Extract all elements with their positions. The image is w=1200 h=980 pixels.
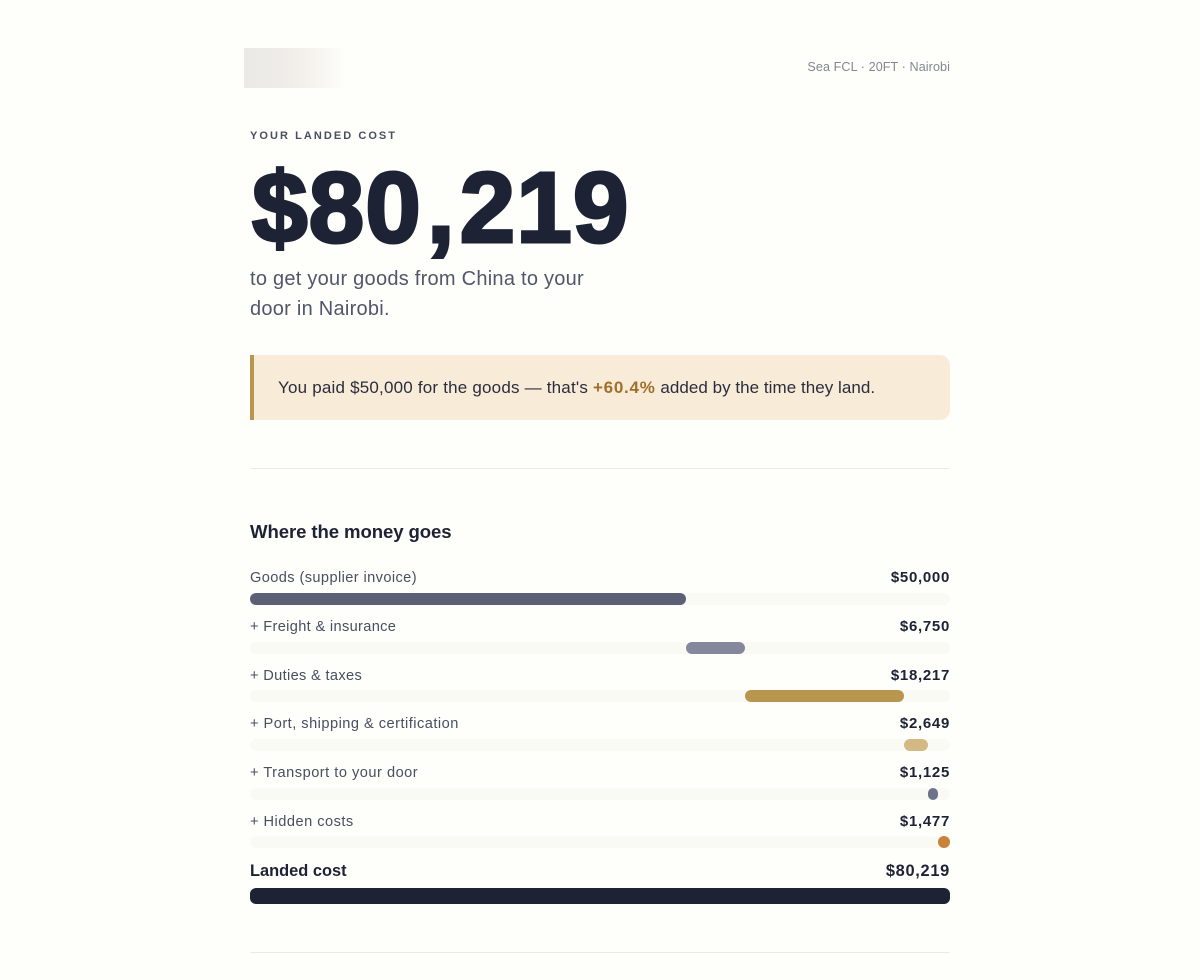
text: $1,477 <box>900 813 950 830</box>
row: landed cost total <box>250 862 950 904</box>
row: duties <box>250 667 950 702</box>
route meta: Sea FCL · 20FT · Nairobi <box>807 60 950 74</box>
eyebrow label: YOUR LANDED COST <box>250 130 397 142</box>
callout text: You paid $50,000 for the goods — that's +60.4% added by the time they land. <box>278 378 875 397</box>
headline total: $80,219 <box>252 152 630 264</box>
row: freight <box>250 618 950 654</box>
subheading: to get your goods from China to your <box>250 268 584 290</box>
section heading: Where the money goes <box>250 521 452 542</box>
text: + Hidden costs <box>250 814 354 830</box>
text: Landed cost <box>250 862 347 880</box>
text: $1,125 <box>900 764 950 781</box>
row: hidden <box>250 813 950 848</box>
row: goods <box>250 569 950 605</box>
row: port <box>250 715 950 751</box>
text: $6,750 <box>900 618 950 635</box>
text: + Port, shipping & certification <box>250 716 459 732</box>
text: + Duties & taxes <box>250 668 362 684</box>
callout <box>250 355 950 420</box>
row: transport <box>250 764 950 800</box>
text: + Transport to your door <box>250 765 418 781</box>
text: $50,000 <box>891 569 950 586</box>
text: $18,217 <box>891 667 950 684</box>
text: $2,649 <box>900 715 950 732</box>
text: Goods (supplier invoice) <box>250 570 417 586</box>
text: + Freight & insurance <box>250 619 396 635</box>
logo placeholder <box>244 48 346 88</box>
subheading <box>250 268 584 320</box>
subheading: door in Nairobi. <box>250 298 390 320</box>
callout accent bar <box>250 355 254 420</box>
text: $80,219 <box>886 862 950 880</box>
